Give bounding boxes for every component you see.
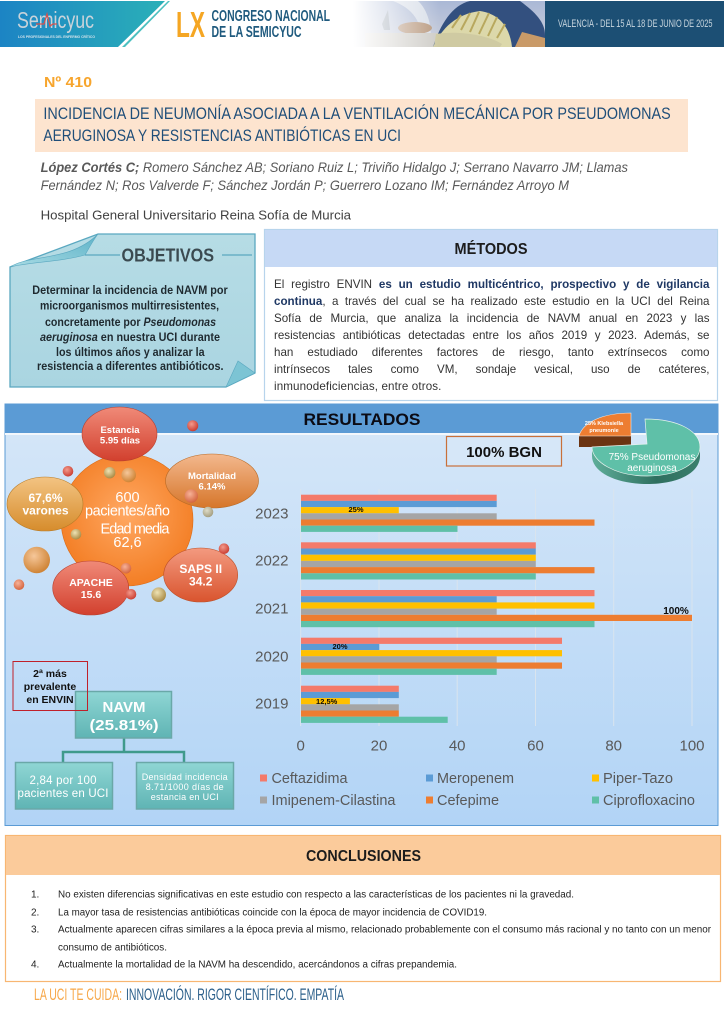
logo: Semicyuc: LOS PROFESIONALES DEL ENFERMO CRÍTICO bbox=[18, 34, 95, 39]
footer slogan: INNOVACIÓN. RIGOR CIENTÍFICO. EMPATÍA bbox=[126, 985, 344, 1004]
pie slice: klebsiella bbox=[579, 413, 631, 447]
legend: Meropenem bbox=[437, 771, 514, 787]
metodos text: El registro ENVIN es un estudio multicéntrico, prospectivo y de vigilancia bbox=[274, 278, 709, 290]
callout: 2a mas prevalente: prevalente bbox=[24, 681, 76, 693]
heading: resultados: RESULTADOS bbox=[304, 410, 420, 429]
box: densidad incidencia: Densidad incidencia bbox=[142, 772, 228, 782]
header banner bbox=[0, 1, 724, 47]
footer slogan bbox=[34, 985, 344, 1004]
big bubble: 600 pacientes: 62,6 bbox=[113, 535, 142, 551]
legend: Ceftazidima bbox=[272, 771, 348, 787]
big bubble: 600 pacientes: Edad media bbox=[100, 522, 170, 538]
pie slice: klebsiella: 25% Klebsiella bbox=[585, 421, 624, 427]
year labels: 2022 bbox=[255, 552, 288, 570]
pie slice: pseudomonas bbox=[592, 419, 700, 484]
objetivos text: Determinar la incidencia de NAVM por bbox=[32, 285, 228, 297]
metodos text: inmunodeficiencias, entre otros. bbox=[274, 380, 442, 392]
conclusiones list: No existen diferencias significativas en este estudio con respecto a las características de los pacientes ni la gravedad. bbox=[58, 890, 574, 900]
pie slice: pseudomonas: aeruginosa bbox=[627, 463, 677, 474]
pie slice: klebsiella: pneumonie bbox=[589, 428, 619, 434]
conclusiones list: 1. bbox=[31, 890, 39, 900]
logo: Semicyuc bbox=[17, 7, 95, 39]
callout: 2a mas prevalente: en ENVIN bbox=[26, 694, 74, 706]
legend: Imipenem-Cilastina bbox=[272, 793, 396, 809]
congress name: DE LA SEMICYUC bbox=[212, 24, 302, 41]
panel: metodos bbox=[264, 230, 718, 400]
bubble: estancia: 5.95 días bbox=[100, 436, 140, 446]
objetivos text: aeruginosa en nuestra UCI durante bbox=[40, 332, 220, 344]
bubble: APACHE: 15.6 bbox=[81, 589, 101, 601]
hospital: Hospital General Universitario Reina Sofía de Murcia bbox=[41, 208, 352, 222]
bubble: APACHE bbox=[53, 561, 129, 615]
title block bbox=[35, 99, 688, 152]
congress name bbox=[212, 8, 330, 41]
bubble: varones: varones bbox=[22, 504, 69, 518]
box: densidad incidencia bbox=[136, 762, 234, 809]
bars 2020 bbox=[301, 638, 562, 675]
metodos text: resistencias antibióticas detectadas entre los años 2019 y 2023. Además, se bbox=[274, 328, 710, 342]
logo: Semicyuc: Semicyuc bbox=[17, 7, 94, 33]
heading: objetivos: OBJETIVOS bbox=[122, 246, 214, 266]
big bubble: 600 pacientes: pacientes/año bbox=[85, 504, 170, 520]
heading: metodos: MÉTODOS bbox=[454, 239, 528, 258]
bubble: mortalidad: Mortalidad bbox=[188, 471, 236, 482]
date strip bbox=[545, 1, 724, 47]
bubble: varones: 67,6% bbox=[28, 491, 63, 505]
objetivos text: los últimos años y analizar la bbox=[56, 347, 205, 359]
congress name: CONGRESO NACIONAL bbox=[212, 8, 330, 25]
objetivos text: resistencia a diferentes antibióticos. bbox=[37, 361, 224, 373]
congress LX mark: LX bbox=[176, 4, 205, 45]
bubble: varones bbox=[7, 477, 83, 531]
box: 2,84 por 100: pacientes en UCI bbox=[18, 788, 108, 800]
objetivos text: concretamente por Pseudomonas bbox=[45, 317, 216, 329]
footer slogan: LA UCI TE CUIDA: bbox=[34, 986, 122, 1004]
year labels: 2021 bbox=[255, 600, 288, 618]
bubble: estancia bbox=[82, 407, 157, 461]
axis labels: 100 bbox=[679, 738, 705, 754]
axis labels: 40 bbox=[449, 738, 466, 754]
axis labels bbox=[297, 738, 705, 754]
big bubble: 600 pacientes: 600 bbox=[115, 490, 140, 506]
conclusiones list: 3. bbox=[31, 924, 39, 936]
pie chart bbox=[579, 413, 700, 484]
conclusiones list bbox=[31, 890, 712, 970]
authors bbox=[41, 159, 628, 193]
big bubble: 600 pacientes bbox=[61, 454, 193, 586]
callout: 2a mas prevalente bbox=[13, 662, 88, 710]
poster number: Nº 410 bbox=[44, 74, 92, 91]
legend: Ciprofloxacino bbox=[603, 793, 695, 809]
metodos text: intrínsecos tales como VM, sondaje vesical, uso de catéteres, bbox=[274, 362, 710, 376]
bars 2019 bbox=[301, 686, 448, 723]
conclusiones list: 4. bbox=[31, 960, 39, 970]
bubble: mortalidad: 6.14% bbox=[199, 482, 226, 492]
bubble: estancia: Estancia bbox=[100, 425, 140, 436]
org chart: NAVM bbox=[16, 692, 234, 809]
conclusiones list: Actualmente aparecen cifras similares a la época previa al mismo, relacionado probablemente con el consumo más racional y no tanto con un menor bbox=[58, 924, 712, 936]
year labels: 2020 bbox=[255, 648, 288, 666]
data labels: 12,5% bbox=[316, 697, 338, 706]
conclusiones list: La mayor tasa de resistencias antibióticas coincide con la época de mayor incidencia de COVID19. bbox=[58, 908, 487, 918]
box: NAVM: NAVM bbox=[102, 699, 146, 716]
box: 2,84 por 100 bbox=[16, 762, 112, 809]
bars 2023 bbox=[301, 495, 594, 532]
pie slice: pseudomonas: 75% Pseudomonas bbox=[609, 452, 695, 463]
conclusiones list: consumo de antibióticos. bbox=[58, 942, 167, 954]
bubble: SAPS II: 34.2 bbox=[189, 574, 213, 588]
data labels: 20% bbox=[332, 642, 348, 651]
authors: López Cortés C; Romero Sánchez AB; Soriano Ruiz L; Triviño Hidalgo J; Serrano Navarro JM; Llamas bbox=[41, 159, 628, 175]
legend: Piper-Tazo bbox=[603, 771, 673, 787]
bubble: mortalidad bbox=[166, 454, 258, 508]
bubble diagram bbox=[7, 407, 258, 615]
objetivos text: microorganismos multirresistentes, bbox=[40, 300, 219, 312]
box: 2,84 por 100: 2,84 por 100 bbox=[30, 775, 96, 787]
photo: Valencia architecture bbox=[353, 1, 545, 47]
panel: resultados bbox=[5, 404, 718, 826]
bars 2022 bbox=[301, 542, 594, 580]
banner logo background bbox=[0, 1, 165, 47]
authors: Fernández N; Ros Valverde F; Sánchez Jordán P; Guerrero Lozano IM; Fernández Arroyo M bbox=[41, 177, 569, 193]
data labels: 25% bbox=[348, 505, 364, 514]
axis labels: 60 bbox=[527, 738, 544, 754]
metodos text: continua, a través del cual se ha realizado este estudio en la UCI del Reina bbox=[274, 294, 710, 308]
bar chart: resistencias bbox=[255, 489, 705, 809]
title block: AERUGINOSA Y RESISTENCIAS ANTIBIÓTICAS EN UCI bbox=[43, 126, 401, 145]
year labels: 2019 bbox=[255, 696, 288, 712]
bubble: APACHE: APACHE bbox=[69, 577, 113, 589]
axis labels: 80 bbox=[605, 738, 622, 754]
year labels: 2023 bbox=[255, 506, 288, 522]
panel: objetivos bbox=[10, 234, 255, 387]
metodos text bbox=[274, 276, 710, 396]
callout: 100% BGN bbox=[446, 436, 562, 466]
data labels: 100% bbox=[663, 606, 689, 617]
box: NAVM: (25.81%) bbox=[90, 717, 158, 734]
axis labels: 20 bbox=[371, 738, 387, 754]
box: NAVM bbox=[76, 692, 172, 738]
box: densidad incidencia: estancia en UCI bbox=[151, 792, 219, 802]
metodos text: han estudiado diferentes factores de riesgo, tanto extrínsecos como bbox=[274, 346, 710, 358]
conclusiones list: Actualmente la mortalidad de la NAVM ha descendido, acercándonos a cifras prepandemia. bbox=[58, 960, 457, 970]
axis labels: 0 bbox=[297, 738, 305, 754]
bars 2021 bbox=[301, 590, 692, 627]
legend bbox=[260, 771, 695, 809]
decorative spheres bbox=[14, 420, 229, 602]
panel: conclusiones bbox=[6, 836, 720, 982]
callout: 2a mas prevalente: 2ª más bbox=[33, 668, 67, 680]
metodos text: Sofía de Murcia, que analiza la incidencia de NAVM anual en 2023 y las bbox=[274, 312, 710, 324]
data labels bbox=[316, 505, 689, 706]
objetivos text bbox=[32, 285, 228, 373]
callout: 100% BGN: 100% BGN bbox=[466, 444, 542, 461]
year labels bbox=[255, 506, 288, 712]
legend: Cefepime bbox=[437, 793, 499, 809]
bubble: SAPS II bbox=[164, 548, 238, 602]
heading: conclusiones: CONCLUSIONES bbox=[306, 848, 421, 865]
conclusiones list: 2. bbox=[31, 908, 39, 918]
box: densidad incidencia: 8.71/1000 días de bbox=[146, 782, 224, 792]
bubble: SAPS II: SAPS II bbox=[179, 562, 222, 576]
